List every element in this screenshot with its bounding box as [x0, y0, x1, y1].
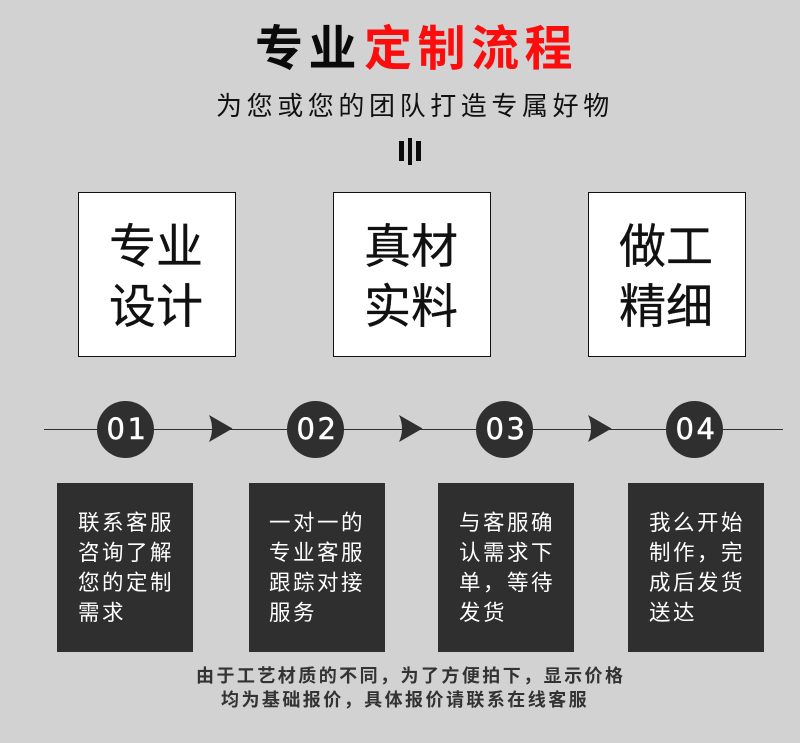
step card 4: 我么开始	[649, 511, 745, 535]
arrow 1	[209, 415, 232, 442]
step card 4: 制作，完	[649, 541, 745, 565]
step card 3: 单，等待	[459, 571, 555, 595]
footnote: 均为基础报价，具体报价请联系在线客服	[221, 690, 589, 710]
subtitle: 为您或您的团队打造专属好物	[216, 91, 614, 121]
footnote: 由于工艺材质的不同，为了方便拍下，显示价格	[196, 666, 625, 686]
step number 03	[476, 401, 533, 458]
process line	[44, 429, 783, 430]
step card 1: 需求	[78, 601, 126, 625]
step card 1: 您的定制	[78, 571, 174, 595]
panel: fine workmanship: 做工	[619, 220, 713, 273]
panel: real materials: 实料	[364, 280, 458, 333]
step card 1: 咨询了解	[78, 541, 174, 565]
step card 3: 与客服确	[459, 511, 555, 535]
panel: professional design: 设计	[109, 280, 203, 333]
step number 04: 04	[676, 412, 717, 446]
panel: fine workmanship	[588, 192, 746, 357]
step number 04	[666, 401, 723, 458]
arrow 3	[588, 415, 612, 442]
title: 专业定制流程	[255, 23, 578, 76]
step number 01	[97, 401, 154, 458]
step card 2: 一对一的	[269, 511, 365, 535]
step card 1	[57, 483, 193, 652]
step card 2: 专业客服	[269, 541, 365, 565]
panel: real materials	[333, 192, 491, 357]
panel: real materials: 真材	[364, 220, 458, 273]
step card 3	[438, 483, 574, 652]
step card 4: 成后发货	[649, 571, 745, 595]
step card 2: 跟踪对接	[269, 571, 365, 595]
step card 1: 联系客服	[78, 511, 174, 535]
step number 02: 02	[297, 412, 338, 446]
step number 02	[287, 401, 344, 458]
panel: professional design: 专业	[109, 220, 203, 273]
footnote	[196, 666, 625, 710]
step card 2: 服务	[269, 601, 317, 625]
panel: fine workmanship: 精细	[619, 280, 713, 333]
panel: professional design	[78, 192, 236, 357]
step card 4: 送达	[649, 601, 697, 625]
step card 2	[249, 483, 385, 652]
icon: three vertical bars	[399, 138, 421, 165]
arrow 2	[399, 415, 422, 442]
step card 3: 认需求下	[459, 541, 555, 565]
step card 4	[628, 483, 764, 652]
step card 3: 发货	[459, 601, 507, 625]
step number 01: 01	[107, 412, 148, 446]
step number 03: 03	[486, 412, 527, 446]
